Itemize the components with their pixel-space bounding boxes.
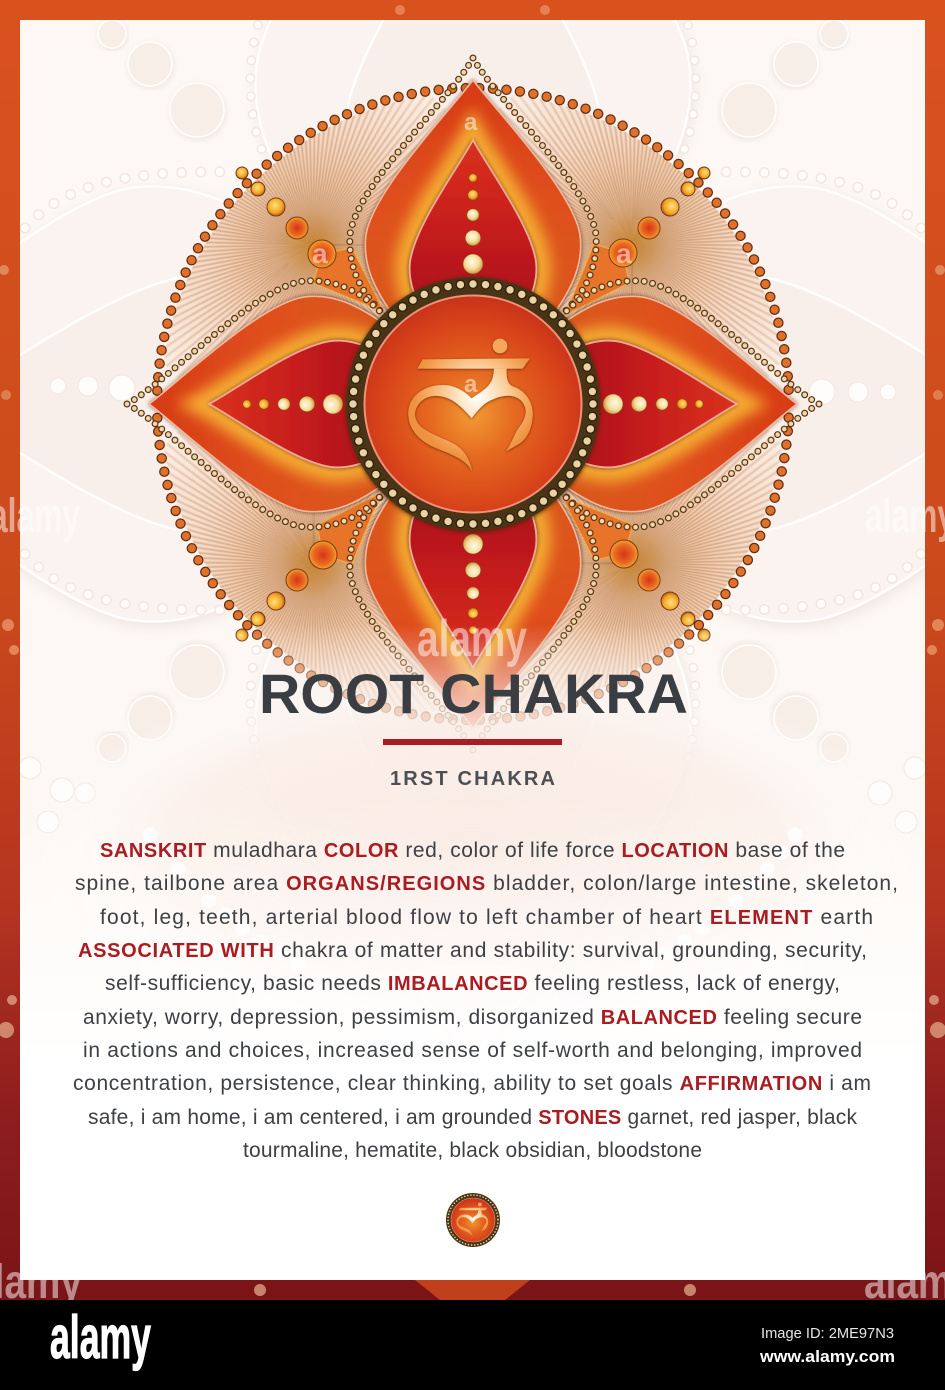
watermark marks: a (312, 238, 328, 269)
background circles and dotted lines (19, 20, 926, 833)
body text block: tourmaline, hematite, black obsidian, bloodstone (243, 1139, 702, 1162)
body text block: spine, tailbone area ORGANS/REGIONS bladder, colon/large intestine, skeleton, (75, 872, 898, 895)
body text block: ASSOCIATED WITH chakra of matter and stability: survival, grounding, security, (78, 939, 867, 962)
title underline (383, 739, 562, 745)
petal: top (365, 80, 581, 318)
title: ROOT CHAKRA (259, 662, 688, 725)
central disc with bead ring (346, 277, 600, 531)
body text block: anxiety, worry, depression, pessimism, disorganized BALANCED feeling secure (83, 1006, 862, 1029)
footer image id: Image ID: 2ME97N3 (761, 1325, 894, 1342)
petal bead outlines (127, 58, 819, 750)
root chakra mandala (127, 58, 819, 750)
black footer bar (0, 1300, 945, 1390)
background mandala petals (20, 20, 925, 708)
footer logo: alamy (50, 1304, 151, 1371)
body text block: SANSKRIT muladhara COLOR red, color of life force LOCATION base of the (100, 839, 845, 862)
watermark marks: alamy (417, 610, 527, 668)
petal: right (559, 296, 797, 512)
small chakra medallion (446, 1193, 500, 1247)
body text block: safe, i am home, i am centered, i am grounded STONES garnet, red jasper, black (88, 1106, 858, 1129)
footer url: www.alamy.com (759, 1347, 895, 1366)
body text block: in actions and choices, increased sense of self-worth and belonging, improved (83, 1039, 862, 1062)
subtitle: 1RST CHAKRA (390, 768, 555, 790)
icon: root chakra symbol (408, 339, 533, 472)
orange bead ring (157, 88, 789, 720)
watermark marks: a (464, 371, 478, 398)
watermark marks: a (464, 109, 478, 136)
body text block: concentration, persistence, clear thinking, ability to set goals AFFIRMATION i am (73, 1072, 871, 1095)
watermark marks: a (616, 238, 632, 269)
diagonal gold beads (236, 167, 710, 641)
body text block: foot, leg, teeth, arterial blood flow to left chamber of heart ELEMENT earth (100, 906, 873, 929)
corner kites (313, 244, 633, 564)
petal: bottom (365, 490, 581, 728)
radiating ray fans (218, 149, 728, 659)
petal: left (149, 296, 387, 512)
body text block: self-sufficiency, basic needs IMBALANCED feeling restless, lack of energy, (105, 972, 840, 995)
body text block (73, 839, 898, 1162)
